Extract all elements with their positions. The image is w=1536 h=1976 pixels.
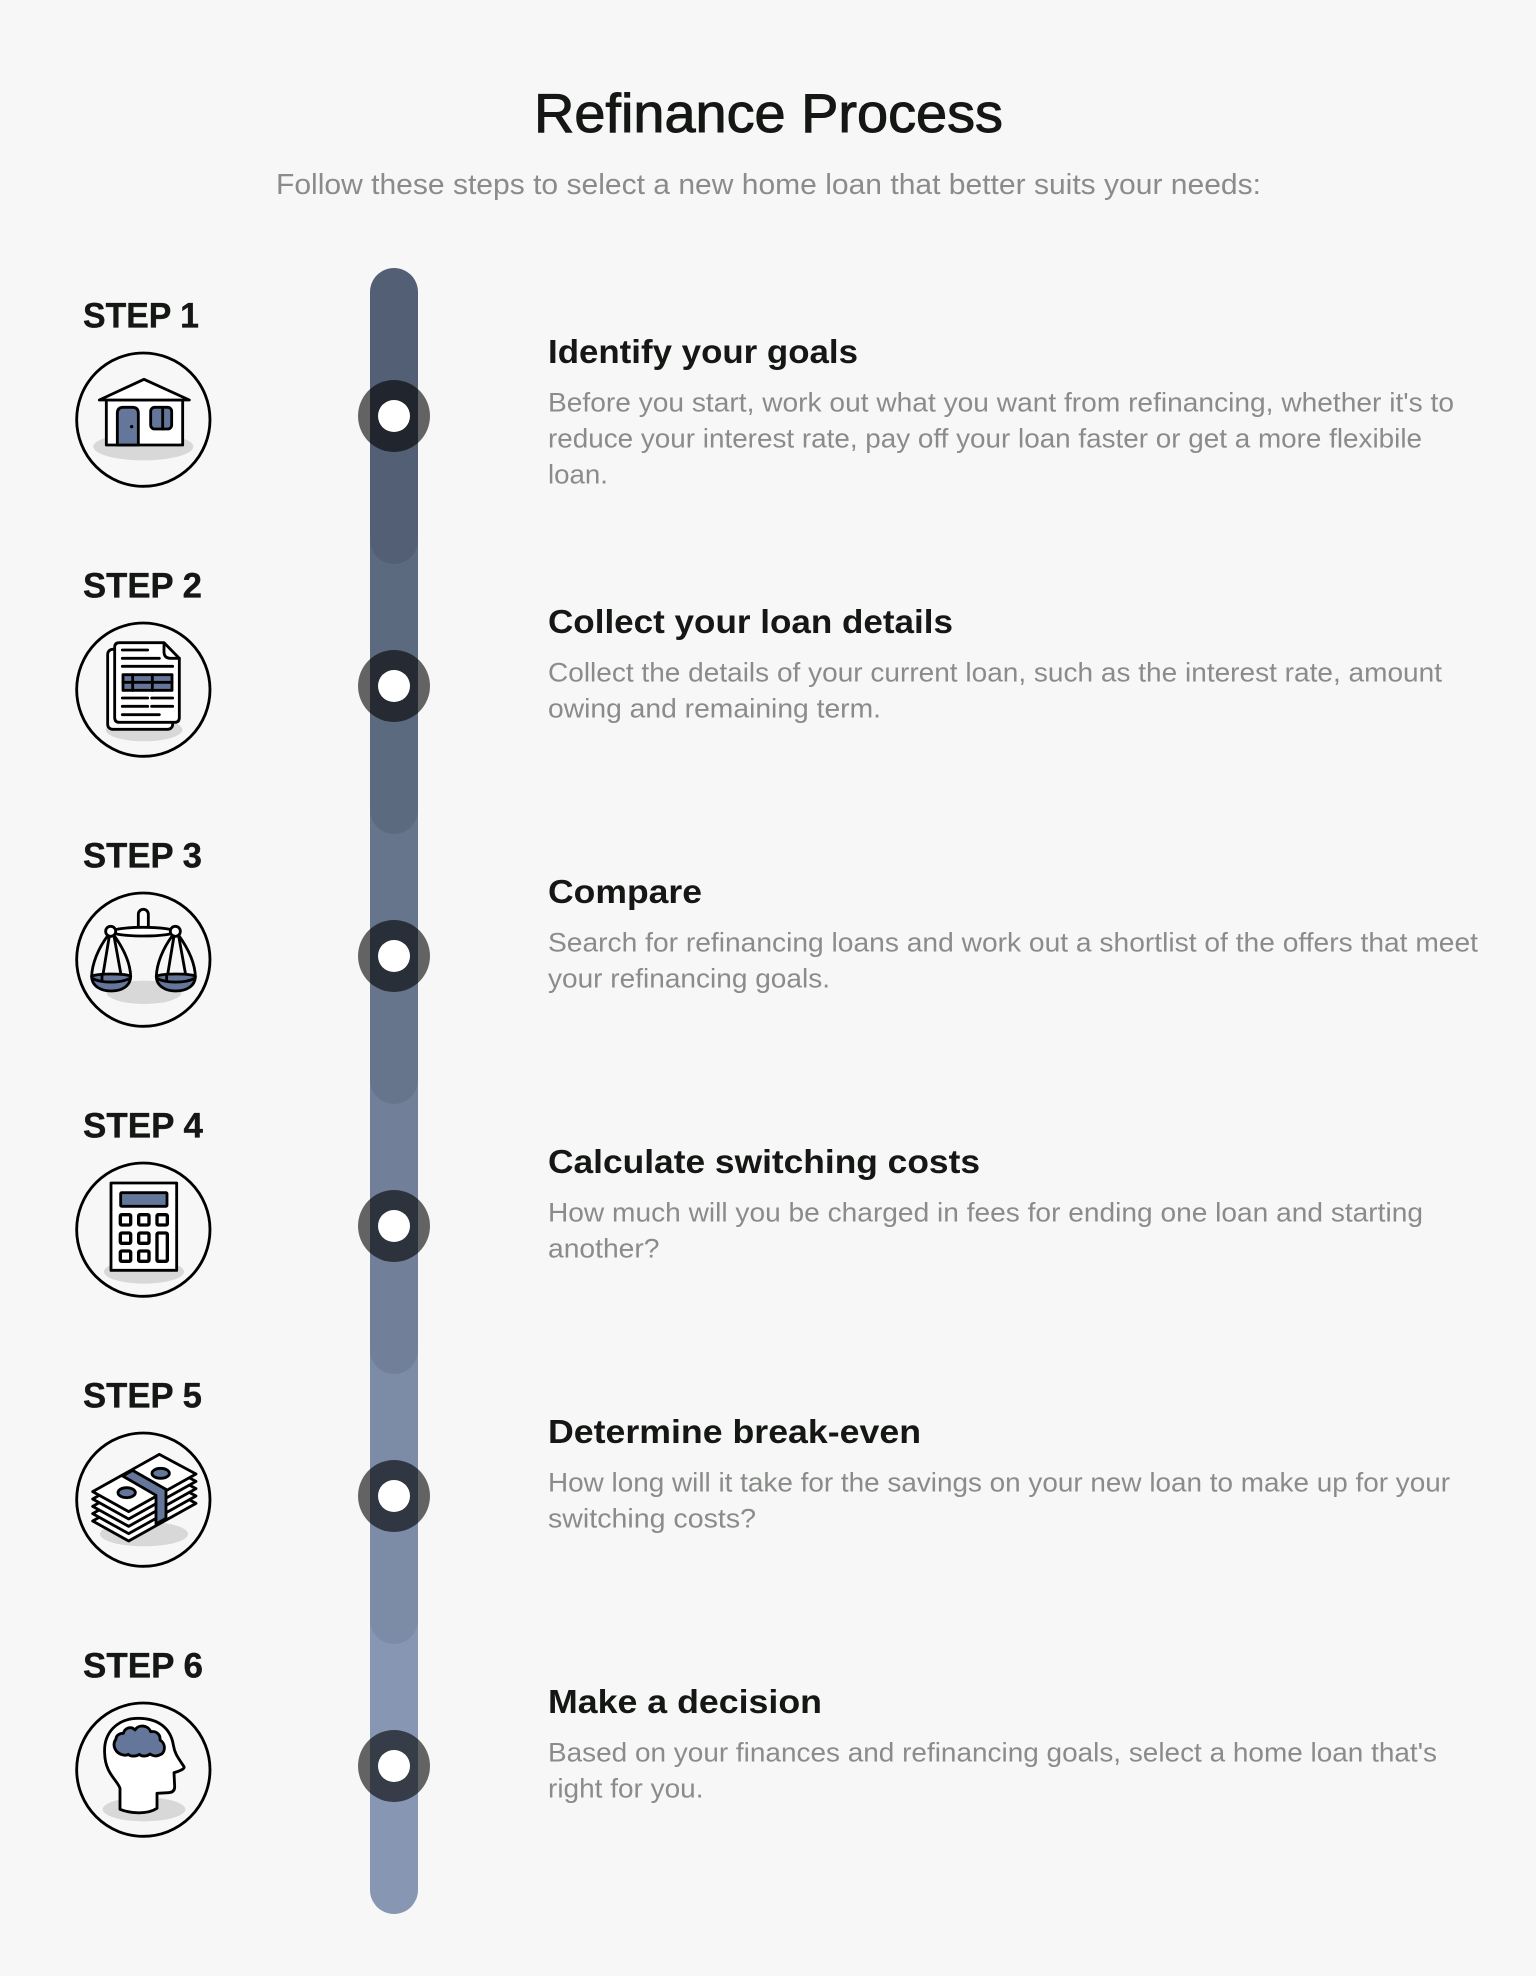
step 2 text [548,603,1443,724]
timeline marker 5 [358,1460,430,1532]
step 6 text: Make a decision [548,1683,822,1720]
step 1 text: reduce your interest rate, pay off your loan faster or get a more flexibile [548,424,1422,454]
step 3 text: Compare [548,873,702,910]
timeline marker 4 [358,1190,430,1262]
step 5 text: Determine break-even [548,1413,921,1450]
step 2 text: owing and remaining term. [548,694,881,724]
step 1 text: loan. [548,460,608,490]
step 4 label: STEP 4 [83,1107,204,1146]
step 5 text: switching costs? [548,1504,756,1534]
step 3 text: your refinancing goals. [548,964,830,994]
step 1 text: Identify your goals [548,333,858,370]
icon: house [77,353,210,486]
step 4 text [548,1143,1423,1264]
timeline marker 1 [358,380,430,452]
left pan [92,926,131,991]
icon: calculator [77,1163,210,1296]
title: Refinance Process [534,82,1003,144]
icon: scales [77,893,210,1026]
timeline marker 3 [358,920,430,992]
step 4 text: another? [548,1234,660,1264]
icon: head with brain [77,1703,210,1836]
step 3 label: STEP 3 [83,837,202,876]
step 2 text: Collect the details of your current loan, such as the interest rate, amount [548,658,1443,688]
subtitle: Follow these steps to select a new home loan that better suits your needs: [276,169,1261,201]
step 3 text: Search for refinancing loans and work out a shortlist of the offers that meet [548,928,1479,958]
step 5 text [548,1413,1450,1534]
step 4 text: How much will you be charged in fees for ending one loan and starting [548,1198,1423,1228]
step 5 text: How long will it take for the savings on your new loan to make up for your [548,1468,1450,1498]
step 4 text: Calculate switching costs [548,1143,980,1180]
step 6 label: STEP 6 [83,1647,203,1686]
step 1 text: Before you start, work out what you want from refinancing, whether it's to [548,388,1454,418]
step 5 label: STEP 5 [83,1377,202,1416]
timeline bar [358,268,430,1914]
step 6 text: right for you. [548,1774,704,1804]
timeline marker 2 [358,650,430,722]
step 1 text [548,333,1454,490]
step 1 label: STEP 1 [83,297,199,336]
icon: document [77,623,210,756]
icon: money stack [77,1433,210,1566]
timeline marker 6 [358,1730,430,1802]
step 6 text [548,1683,1437,1804]
step 3 text [548,873,1479,994]
right pan [156,926,195,991]
step 2 label: STEP 2 [83,567,202,606]
step 6 text: Based on your finances and refinancing goals, select a home loan that's [548,1738,1437,1768]
step 2 text: Collect your loan details [548,603,953,640]
